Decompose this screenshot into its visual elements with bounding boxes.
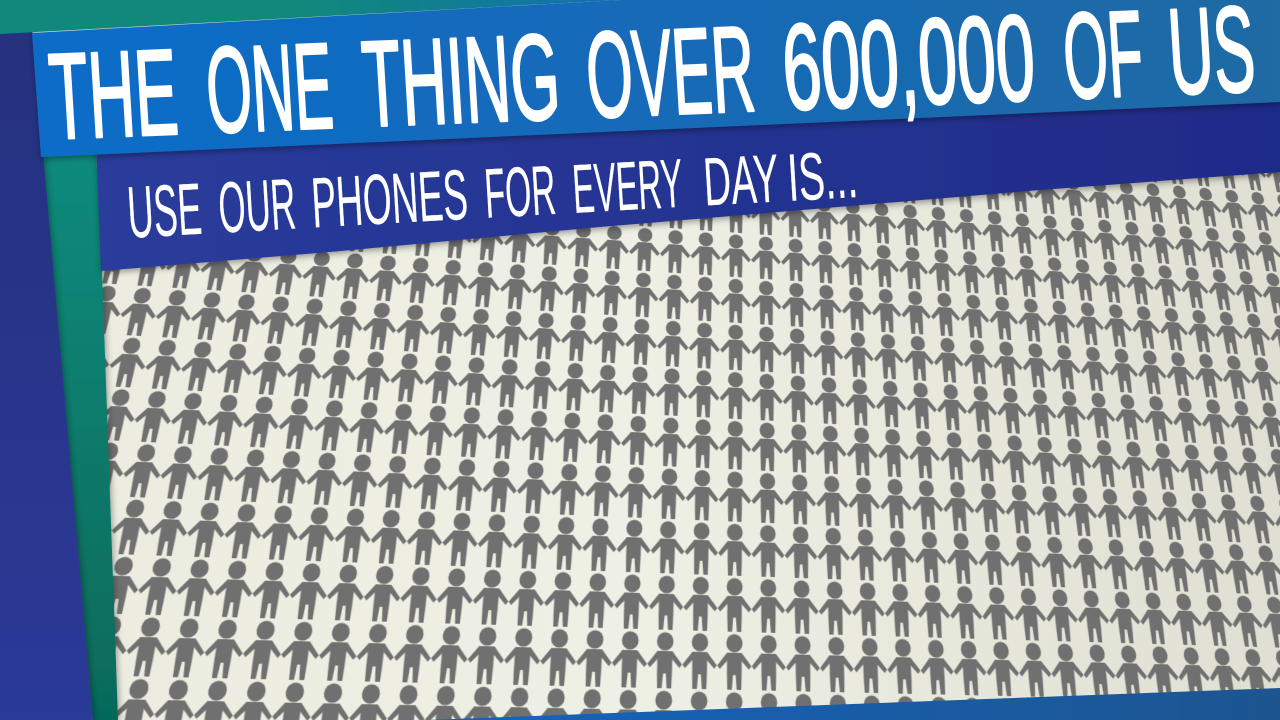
title: THING [358,8,564,152]
subtitle: FOR [482,151,558,233]
panel: teal top strip [0,0,620,34]
subtitle: OUR [216,164,298,249]
panel: blue title banner [32,0,1280,157]
subtitle: IS... [785,137,860,216]
panel: teal left strip [41,150,118,720]
title: THE [45,23,182,165]
subtitle: EVERY [570,144,685,228]
subtitle: PHONES [309,156,470,243]
panel: navy subtitle band [95,90,1280,271]
subtitle [125,132,860,254]
panel: people pictogram grid [100,172,1280,720]
panel: navy left column [0,28,93,720]
title [45,0,1259,165]
subtitle: DAY [701,140,781,220]
panel: bottom blue strip [427,688,1280,720]
subtitle: USE [125,169,204,254]
title: ONE [202,17,337,159]
people pictogram pattern in perspective [102,172,1280,720]
